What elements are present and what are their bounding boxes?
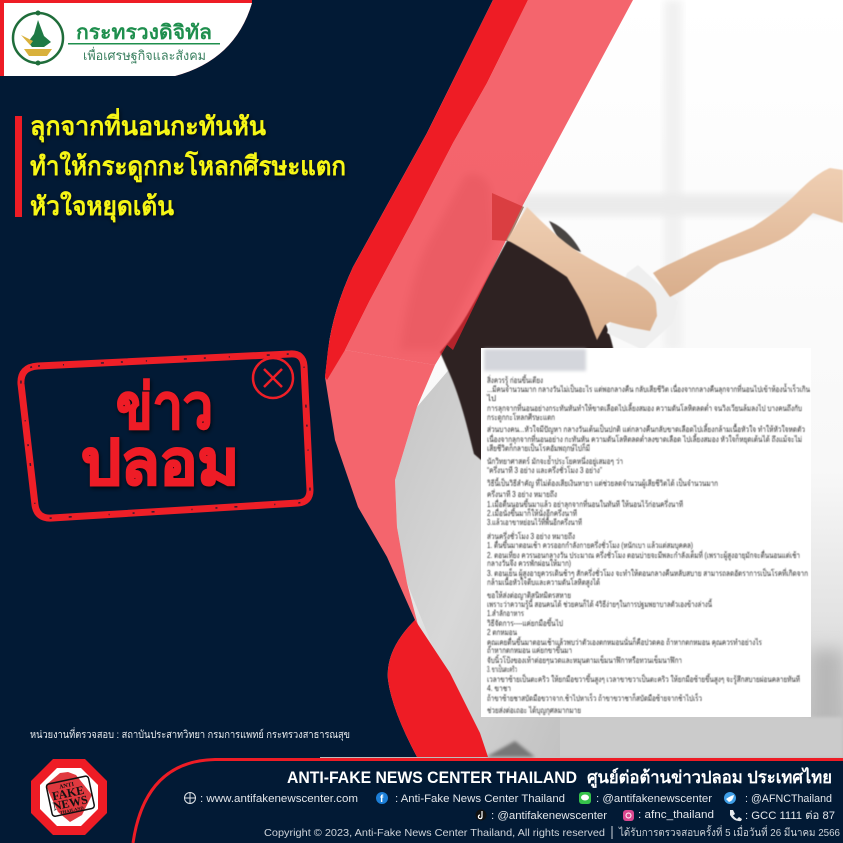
icon: twitter <box>724 792 736 804</box>
screenshot of the false post <box>481 348 811 717</box>
contact rows: : Anti-Fake News Center Thailand <box>395 793 565 805</box>
post text <box>486 374 810 715</box>
post text: “ครึ่งนาที 3 อย่าง และครึ่งชั่วโมง 3 อย่าง” <box>487 464 602 475</box>
footer heading <box>287 767 832 789</box>
lower red curved shape <box>388 620 488 757</box>
icon: instagram <box>623 810 634 821</box>
footer heading: ANTI-FAKE NEWS CENTER THAILAND <box>287 768 577 787</box>
footer panel <box>133 760 843 843</box>
contact rows <box>184 792 835 822</box>
post text: ส่วนครึ่งชั่วโมง 3 อย่าง หมายถึง <box>487 530 575 541</box>
post text: กล้ามเนื้อหัวใจตีบและความดันโลหิตสูงได้ <box>487 576 600 588</box>
copyright line: Copyright © 2023, Anti-Fake News Center Thailand, All rights reserved <box>264 827 605 839</box>
contact rows: : @AFNCThailand <box>745 793 832 805</box>
icon: anti-fake news badge <box>31 759 107 835</box>
headline: ทำให้กระดูกกะโหลกศีรษะแตก <box>30 150 346 183</box>
post text: เสียชีวิตก็กลายเป็นโรคอัมพฤกษ์ไปก็มี <box>487 443 590 453</box>
post text: ช่วยส่งต่อเถอะ ได้บุญกุศลมากมาย <box>487 706 581 715</box>
post text: เพราะว่าความรู้นี้ สอนคนได้ ช่วยคนก็ได้ 4วิธีง่ายๆในการปฐมพยาบาลตัวเองข้างล่างนี้ <box>487 598 713 610</box>
raised arm, right <box>653 168 843 297</box>
post text: คุณเคยตื่นขึ้นมาตอนเช้าแล้วพบว่าตัวเองตกหมอนนั่นก็คือปวดคอ ถ้าหากตกหมอน คุณควรทำอย่างไร <box>487 636 763 647</box>
post text: 1.เมื่อตื่นนอนขึ้นมาแล้ว อย่าลุกจากที่นอนในทันที ให้นอนไว้ก่อนครึ่งนาที <box>487 498 683 509</box>
contact rows: : www.antifakenewscenter.com <box>200 793 358 805</box>
stamp text <box>81 373 239 498</box>
icon: anti-fake news badge: THAILAND <box>59 805 85 815</box>
icon: x in circle <box>253 358 293 398</box>
sleeve <box>607 265 678 350</box>
post text: 3.แล้วเอาขาหย่อนไว้ที่พื้นอีกครึ่งนาที <box>487 516 582 527</box>
post text: สิ่งควรรู้ ก่อนขึ้นเตียง <box>487 374 543 386</box>
footer red arc <box>133 760 843 843</box>
post text: ขอให้ส่งต่อญาติสนิทมิตรสหาย <box>487 591 571 600</box>
icon: tiktok <box>476 810 486 820</box>
stamp text: ข่าว <box>116 373 213 442</box>
copyright line <box>264 825 840 839</box>
photo: woman stretching by the window <box>320 0 843 758</box>
stamp: fake news <box>21 354 310 518</box>
icon: anti-fake news badge: ANTI <box>59 782 75 791</box>
hair <box>440 240 614 460</box>
contact rows: : @antifakenewscenter <box>491 810 607 822</box>
icon: anti-fake news badge: NEWS <box>52 792 89 813</box>
post text: 1. ตื่นขึ้นมาตอนเช้า ควรออกกำลังกายครึ่งชั่วโมง (หนักเบา แล้วแต่สมบุคคล) <box>487 539 693 550</box>
post text: 3. ขาเป็นตะคริว <box>487 664 517 674</box>
icon: facebook <box>376 792 388 805</box>
icon: ministry emblem <box>13 10 63 66</box>
shirt <box>395 345 560 757</box>
icon: facebook: f <box>380 794 384 805</box>
headline: หัวใจหยุดเต้น <box>30 191 174 223</box>
footer heading: ศูนย์ต่อต้านข่าวปลอม ประเทศไทย <box>587 767 832 789</box>
ministry tagline: เพื่อเศรษฐกิจและสังคม <box>83 47 206 64</box>
stamp text: ปลอม <box>81 429 239 498</box>
source agency note: หน่วยงานที่ตรวจสอบ : สถาบันประสาทวิทยา กรมการแพทย์ กระทรวงสาธารณสุข <box>30 727 350 741</box>
navy background panel <box>0 0 493 757</box>
post text: 4. ขาชา <box>487 684 511 693</box>
red diagonal band <box>325 0 528 380</box>
header: ministry logo panel <box>0 0 252 76</box>
post text: วิธีนี้เป็นวิธีสำคัญ ที่ไม่ต้องเสียเงินหายา แต่ช่วยลดจำนวนผู้เสียชีวิตได้ เป็นจำนวนมาก <box>487 477 718 489</box>
title block <box>15 107 346 223</box>
post text: ครึ่งนาที 3 อย่าง หมายถึง <box>487 488 557 499</box>
post text: จับนิ้วโป้งของเท้าต่อยๆนวดและหมุนตามเข็มนาฬิกาหรือทวนเข็มนาฬิกา <box>487 654 682 665</box>
icon: line <box>579 792 591 804</box>
post text: 2 ตกหมอน <box>487 628 517 637</box>
icon: anti-fake news badge: FAKE <box>51 783 85 803</box>
post text: วิธีจัดการ----แค่ยกมือขึ้นไป <box>487 617 563 628</box>
contact rows: : @antifakenewscenter <box>596 793 712 805</box>
shirt seen through the band <box>400 174 495 350</box>
icon: phone <box>730 810 742 821</box>
ministry name: กระทรวงดิจิทัล <box>76 22 212 44</box>
post text: นักวิทยาศาสตร์ มักจะย้ำประโยคหนึ่งอยู่เสมอๆ ว่า <box>487 455 623 467</box>
post text: ถ้าขาซ้ายชาสบัดมือขวาจาก.ช้าไปหาเร็ว ถ้าขาขวาชาก็สบัดมือซ้ายจากช้าไปเร็ว <box>487 693 702 703</box>
contact rows: : afnc_thailand <box>638 809 714 821</box>
headline: ลุกจากที่นอนกะทันหัน <box>30 107 266 143</box>
headline <box>30 107 346 223</box>
arm and hand on head <box>507 207 657 340</box>
post text: กลางวันจึง ควรพักผ่อนให้มาก) <box>487 559 571 568</box>
icon: globe <box>184 792 196 804</box>
post text: ไป <box>486 394 496 403</box>
lower pink band <box>320 340 435 625</box>
post text: 2.เมื่อนั่งขึ้นมาก็ให้นั่งอีกครึ่งนาที <box>487 507 577 518</box>
contact rows: : GCC 1111 ต่อ 87 <box>745 810 835 822</box>
post text: กระดูกกะโหลกศีรษะแตก <box>487 412 555 423</box>
post text: 1.สำลักอาหาร <box>487 609 525 618</box>
translucent pink band <box>345 0 633 365</box>
post text: ถ้าหากตกหมอน แค่ยกขาขึ้นมา <box>487 644 572 655</box>
